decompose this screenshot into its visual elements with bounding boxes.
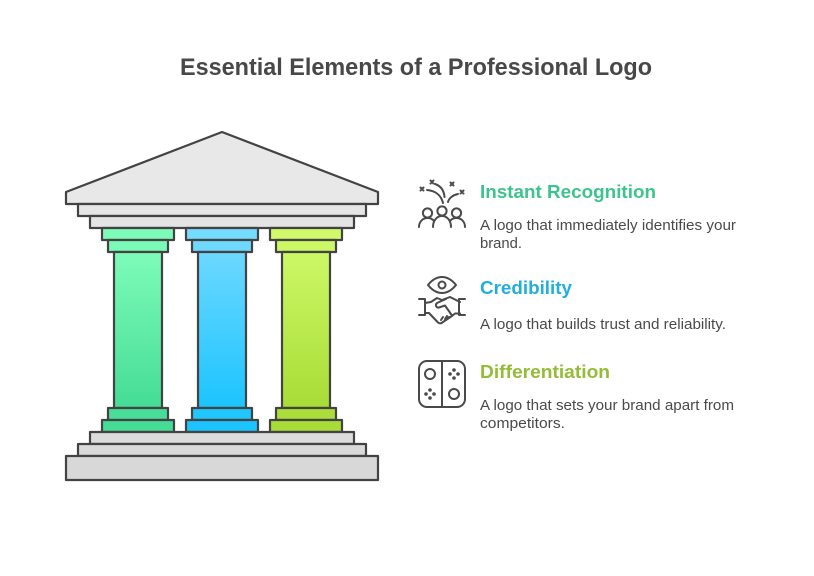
icon: crowd celebrating [419,180,465,227]
text: Differentiation description: competitors. [480,416,565,432]
heading: Instant Recognition: Instant Recognition [480,181,656,202]
text: Instant Recognition description: A logo that immediately identifies your [480,218,736,234]
pillar: lime [270,228,342,432]
text: Differentiation description [480,398,734,432]
text: Credibility description: A logo that builds trust and reliability. [480,317,726,333]
title: Essential Elements of a Professional Logo [180,54,652,81]
text: Instant Recognition description [480,218,736,252]
icon: eye and handshake [419,277,465,323]
text: Differentiation description: A logo that sets your brand apart from [480,398,734,414]
pillar: green [102,228,174,432]
text: Instant Recognition description: brand. [480,236,522,252]
base steps [66,432,378,480]
temple illustration [66,132,378,480]
pillar: blue [186,228,258,432]
icon: game controller [419,361,465,407]
roof [66,132,378,228]
heading: Differentiation: Differentiation [480,361,610,382]
heading: Credibility: Credibility [480,277,573,298]
